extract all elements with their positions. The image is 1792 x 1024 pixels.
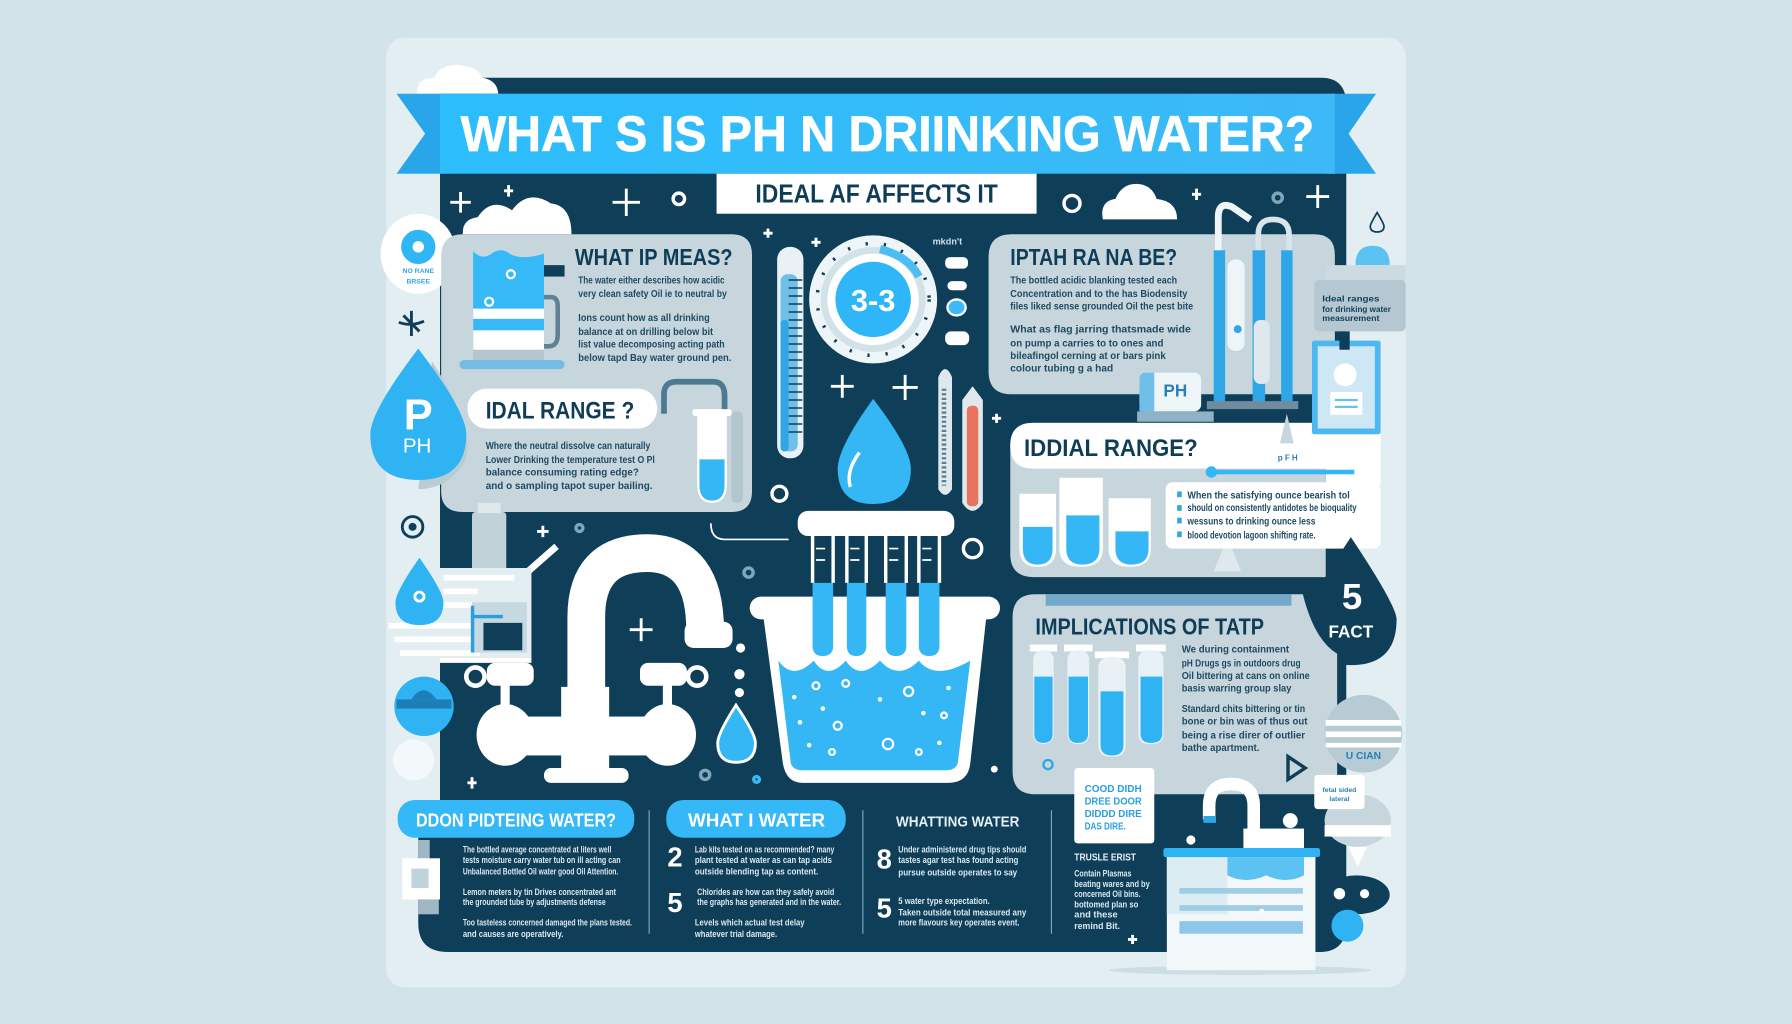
body text: bileafingol cerning at or bars pink <box>1010 351 1166 362</box>
rim <box>750 597 1000 619</box>
body text: files liked sense grounded Oil the pest bite <box>1010 302 1194 313</box>
dot <box>991 766 998 773</box>
column 1 text: tests moisture carry water tub on ill acting can <box>463 855 621 865</box>
icon: test tube with pipe <box>664 382 743 503</box>
icon: water jug <box>459 250 565 369</box>
water <box>778 661 970 770</box>
center water drop <box>838 399 911 504</box>
connector line <box>711 523 789 539</box>
column 3 numbers and text: pursue outside operates to say <box>898 867 1018 877</box>
thermometer <box>777 247 803 458</box>
icon: pH box: PH <box>1163 381 1187 401</box>
heading pill: ideal range: IDAL RANGE ? <box>486 397 634 424</box>
right small disc <box>1325 794 1391 866</box>
panel: implications <box>1013 594 1337 794</box>
mini label: fetal sided <box>1322 787 1356 794</box>
icon: target <box>402 517 423 537</box>
dark blob icons <box>1323 875 1390 942</box>
drop: pH: P <box>404 392 433 440</box>
icon rings <box>576 193 1282 782</box>
body text: Standard chits bittering or tin <box>1182 704 1305 715</box>
body text: What as flag jarring thatsmade wide <box>1010 325 1192 336</box>
drop: fact: FACT <box>1328 622 1374 642</box>
drop: pH: PH <box>403 435 431 458</box>
column 4 text: remind Bit. <box>1074 921 1120 931</box>
subtitle <box>717 174 1037 214</box>
body text: balance at on drilling below bit <box>578 327 714 338</box>
rack <box>798 511 954 536</box>
ring <box>1043 760 1053 769</box>
column 4 text: beating wares and by <box>1074 879 1150 889</box>
body text: Where the neutral dissolve can naturally <box>486 441 651 452</box>
test tubes <box>1030 645 1166 757</box>
column 2 numbers and text: Chlorides are how can they safely avoid <box>697 887 834 897</box>
heading pill 2: WHAT I WATER <box>688 809 825 830</box>
banner <box>397 94 1376 174</box>
body text <box>1010 275 1194 374</box>
dial: 3-3 <box>851 283 895 318</box>
body text: colour tubing g a had <box>1010 363 1113 374</box>
column 2 numbers and text: outside blending tap as content. <box>695 866 818 876</box>
column 2 numbers and text: 2 <box>667 841 683 872</box>
cloud: right <box>1102 184 1177 219</box>
column 2 numbers and text: the graphs has generated and in the water. <box>697 897 841 907</box>
glass tubes <box>938 369 983 511</box>
column 4 text: bottomed plan so <box>1074 899 1139 909</box>
dial legend: mkdn't <box>933 237 962 247</box>
dial <box>809 235 937 363</box>
tubes <box>1019 478 1151 567</box>
small square icon <box>402 840 440 914</box>
column 3 numbers and text: more flavours key operates event. <box>898 918 1019 928</box>
body text: Ions count how as all drinking <box>578 313 710 324</box>
drop: small <box>395 558 443 625</box>
dark main panel <box>418 78 1346 952</box>
heading bar: p F H <box>1278 454 1298 463</box>
column 4 text: and these <box>1074 910 1118 920</box>
body text: list value decomposing acting path <box>578 339 725 350</box>
column 1 text: Too tasteless concerned damaged the plans tested. <box>463 918 632 928</box>
heading pill: ideal range <box>467 389 657 429</box>
badge: blue circle <box>394 677 454 736</box>
column 3 numbers and text <box>877 844 1027 928</box>
body text: on pump a carries to to ones and <box>1010 338 1164 349</box>
column 1 text: and causes are operatively. <box>463 929 563 939</box>
column 2 numbers and text <box>667 841 841 939</box>
white note <box>1074 768 1154 843</box>
body text: balance consuming rating edge? <box>486 467 639 478</box>
panel: ideal range <box>1010 414 1381 577</box>
body text <box>486 441 655 492</box>
list box <box>1166 482 1381 571</box>
grey note: for drinking water <box>1322 305 1391 314</box>
mini label: lateral <box>1329 796 1350 803</box>
card background <box>386 38 1406 987</box>
heading pill 1: DDON PIDTEING WATER? <box>416 809 616 830</box>
list box: should on consistently antidotes be bioquality <box>1187 503 1357 514</box>
subtitle: IDEAL AF AFFECTS IT <box>755 178 998 208</box>
column 4 text <box>1074 853 1150 931</box>
list box: blood devotion lagoon shifting rate. <box>1187 530 1316 541</box>
column 2 numbers and text: Levels which actual test delay <box>695 918 805 928</box>
body text: basis warring group slay <box>1182 683 1292 694</box>
column 2 numbers and text: plant tested at water as can tap acids <box>695 855 832 865</box>
white badge circle <box>381 214 456 294</box>
sink with faucet <box>1163 784 1320 970</box>
pipe <box>1046 594 1291 606</box>
column 4 text: Contain Plasmas <box>1074 869 1131 879</box>
title: WHAT S IS PH N DRIINKING WATER? <box>461 105 1314 162</box>
heading bar: IDDIAL RANGE? <box>1024 435 1198 462</box>
decorative sparkles <box>450 185 1329 944</box>
column 3 numbers and text: tastes agar test has found acting <box>898 855 1018 865</box>
clipboard <box>1312 331 1381 434</box>
pale tag <box>1326 265 1406 281</box>
panel: pH range <box>989 234 1335 394</box>
white badge circle: NO RANE <box>403 268 434 275</box>
right round icon: U CIAN <box>1346 751 1381 762</box>
list box: wessuns to drinking ounce less <box>1187 517 1315 528</box>
grey note: measurement <box>1322 314 1380 323</box>
body text: Lower Drinking the temperature test O Pl <box>486 455 655 466</box>
body text: The bottled acidic blanking tested each <box>1010 275 1177 286</box>
body text: and o sampling tapot super bailing. <box>486 481 653 492</box>
body text <box>1182 645 1310 754</box>
falling drops <box>718 643 755 762</box>
column 3 numbers and text: 5 <box>877 893 892 924</box>
sink shadow <box>1109 966 1371 975</box>
column 1 text: The bottled average concentrated at liters well <box>463 845 611 855</box>
icon: pH box <box>1137 373 1214 422</box>
column 3 numbers and text: 5 water type expectation. <box>898 896 990 906</box>
white badge circle: BRSEE <box>406 278 431 285</box>
heading: IMPLICATIONS OF TATP <box>1035 613 1264 639</box>
icon: cross pin <box>399 311 424 336</box>
column 2 numbers and text: whatever trial damage. <box>694 929 777 939</box>
body text: being a rise direr of outlier <box>1182 730 1305 741</box>
body text: Concentration and to the has Biodensity <box>1010 289 1188 300</box>
drop: pH <box>370 349 468 489</box>
grey note <box>1314 280 1406 331</box>
grey note: Ideal ranges <box>1322 295 1380 304</box>
column 3 numbers and text: Under administered drug tips should <box>898 845 1026 855</box>
body text: The water either describes how acidic <box>578 275 725 286</box>
column 1 text: Unbalanced Bottled Oil water good Oil Attention. <box>463 866 618 876</box>
column 1 text: the grounded tube by adjustments defense <box>463 897 606 907</box>
tubes <box>813 535 939 656</box>
column 4 text: concerned Oil bins. <box>1074 889 1141 899</box>
column 2 numbers and text: Lab kits tested on as recommended? many <box>695 845 835 855</box>
body text: very clean safety Oil ie to neutral by <box>578 289 727 300</box>
white note: DAS DIRE. <box>1085 822 1126 833</box>
column 3 numbers and text: Taken outside total measured any <box>898 907 1027 917</box>
badge: white circle <box>393 739 434 781</box>
white note: DIDDD DIRE <box>1085 809 1142 820</box>
body text: Oil bittering at cans on online <box>1182 671 1310 682</box>
slider <box>1206 466 1354 478</box>
list box: When the satisfying ounce bearish tol <box>1187 490 1350 501</box>
body text: bone or bin was of thus out <box>1182 717 1308 728</box>
blue half circle <box>1355 246 1390 265</box>
bubbles <box>813 680 947 755</box>
apparatus: lab tubes <box>1207 205 1298 409</box>
body text: pH Drugs gs in outdoors drug <box>1182 658 1301 669</box>
mini label <box>1314 775 1365 809</box>
heading pill 2 <box>666 800 846 838</box>
drop outline <box>1370 213 1384 232</box>
column 1 text <box>463 845 632 939</box>
white note: DREE DOOR <box>1085 797 1142 808</box>
small arrow <box>1288 757 1305 779</box>
column 1 text: Lemon meters by tin Drives concentrated ant <box>463 887 616 897</box>
heading pill 1 <box>398 800 634 838</box>
tub body <box>763 617 986 783</box>
drop: fact <box>1305 537 1397 665</box>
cloud: left <box>463 197 571 234</box>
right round icon <box>1325 695 1402 773</box>
white note: COOD DIDH <box>1085 784 1142 795</box>
panel: what pH means <box>441 234 752 512</box>
building and bottle illustration <box>389 503 557 663</box>
body text: We during containment <box>1182 645 1290 656</box>
heading: WHAT IP MEAS? <box>575 244 733 270</box>
heading: IPTAH RA NA BE? <box>1010 244 1177 270</box>
column dividers <box>649 810 1051 934</box>
heading 3: WHATTING WATER <box>896 814 1020 830</box>
body text: bathe apartment. <box>1182 743 1260 754</box>
body text <box>578 275 732 364</box>
column 3 numbers and text: 8 <box>877 844 892 875</box>
column 2 numbers and text: 5 <box>667 887 683 918</box>
dial legend <box>933 237 969 345</box>
tub with tubes <box>750 511 1000 783</box>
body text: below tapd Bay water ground pen. <box>578 353 732 364</box>
drop: fact: 5 <box>1342 576 1362 617</box>
faucet <box>466 553 733 783</box>
column 4 text: TRUSLE ERIST <box>1074 853 1137 864</box>
heading bar <box>1010 414 1381 485</box>
cloud: top left <box>417 65 498 94</box>
